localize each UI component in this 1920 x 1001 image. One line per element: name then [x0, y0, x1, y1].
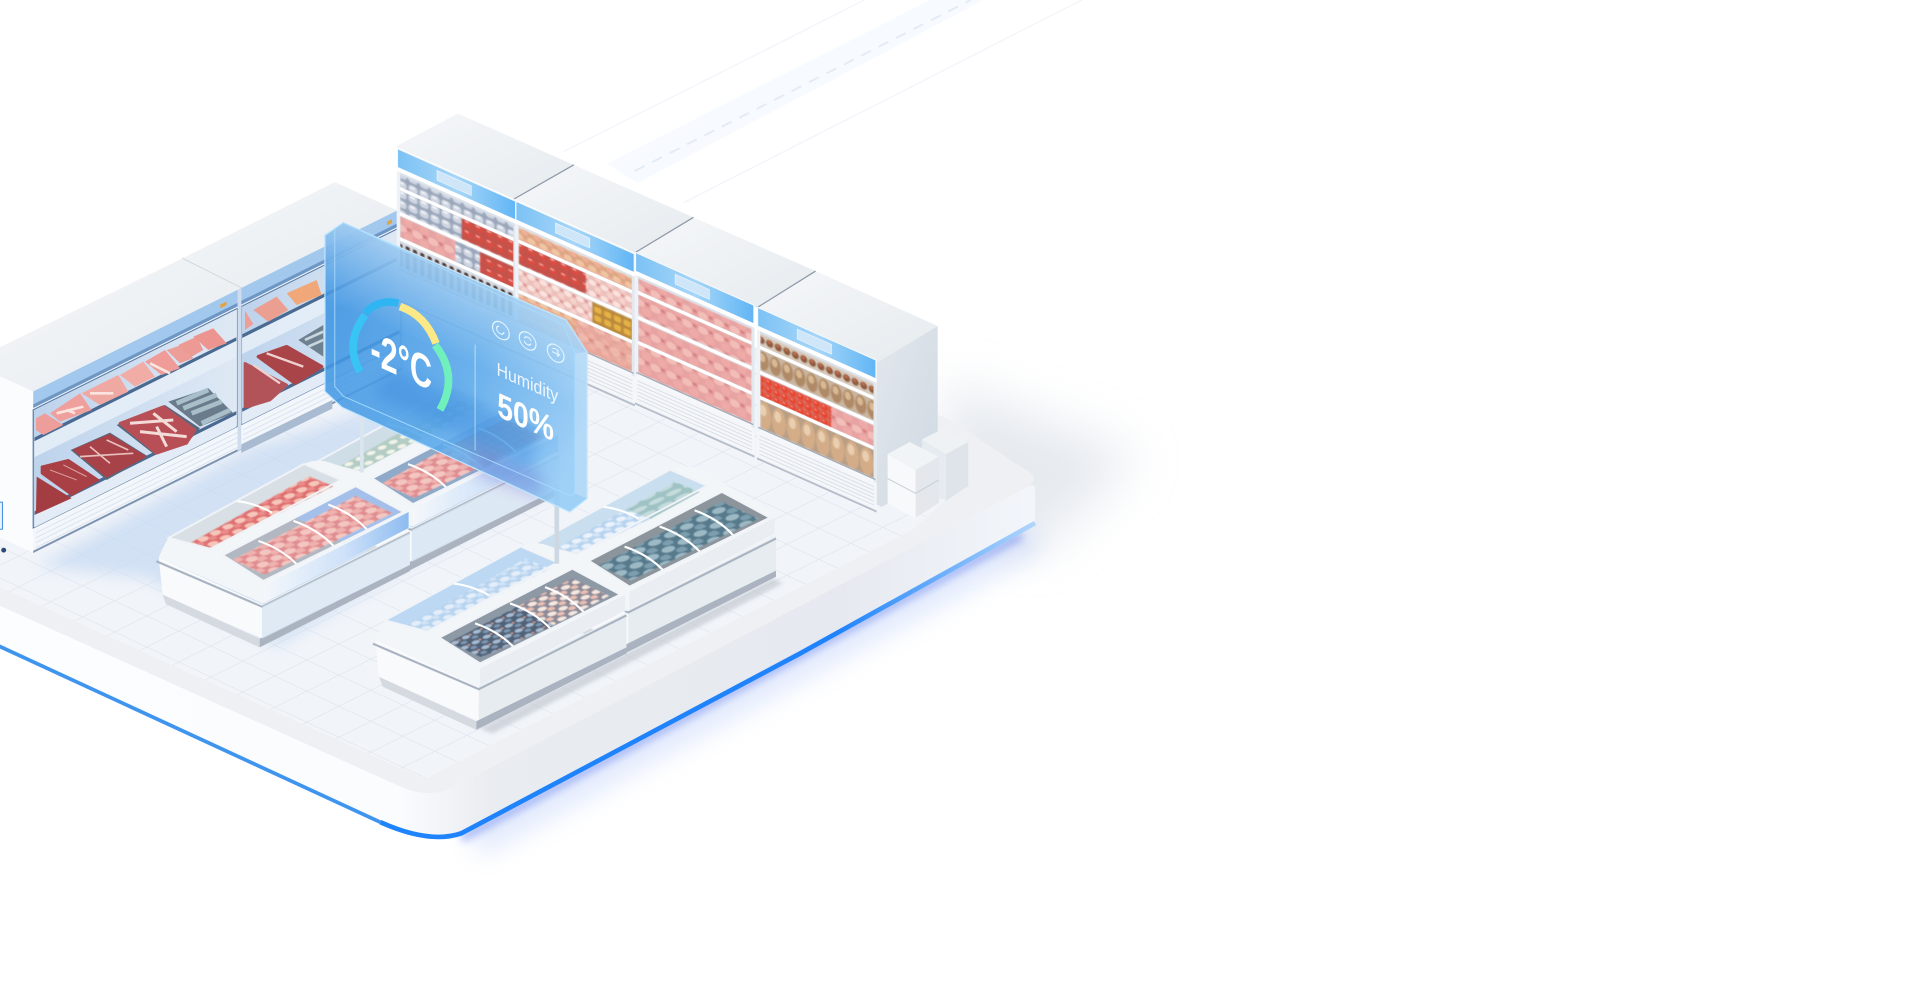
hologram panel: temperature and humidity [325, 223, 587, 512]
platform side [0, 485, 1035, 837]
cabinet front [33, 288, 241, 553]
fridge 2 products [519, 228, 632, 372]
chest freezer front right [373, 543, 626, 730]
panel borders [325, 223, 587, 512]
status icons [493, 318, 564, 365]
panel divider [474, 345, 476, 450]
back row fridge 3 [635, 217, 816, 459]
back row fridge 1 [396, 114, 574, 355]
road and guide lines in the distance [564, 0, 1082, 203]
cabinet end [0, 375, 33, 553]
fridge 3 products [639, 279, 752, 423]
left refrigerated display 2 [182, 182, 403, 453]
fridge 4 products [761, 334, 874, 478]
display 2 lower grille [241, 400, 332, 453]
chest freezer rear right [522, 466, 776, 653]
temperature gauge [353, 302, 449, 410]
back row of upright fridges [396, 114, 968, 519]
back row fridge 4 [757, 271, 938, 514]
fridge 1 products [400, 175, 514, 320]
panel side highlight [575, 352, 587, 498]
left refrigerated display 1 [0, 258, 241, 553]
wide glow under the platform edge [474, 537, 1035, 842]
freezer floor shadow [480, 578, 783, 734]
platform base [0, 246, 1035, 842]
blue light strip right [380, 523, 1035, 837]
hologram support posts [360, 396, 559, 564]
humidity value: 50% [497, 385, 554, 449]
blurred reflections inside glass [474, 443, 542, 498]
chest freezer rear left [306, 384, 559, 571]
temperature value: -2°C [370, 322, 432, 401]
meat trays [36, 328, 233, 513]
chest freezer front left [156, 461, 410, 647]
platform top surface [0, 246, 1034, 793]
humidity label: Humidity [497, 359, 558, 407]
blue floor reflection [37, 394, 542, 646]
cabinet top [0, 258, 241, 391]
close glow under the blue strip [462, 535, 1022, 838]
shopping cart corner [0, 502, 6, 553]
glass panel [325, 223, 587, 512]
tiled floor [0, 283, 954, 779]
meat and fish in display 2 [245, 280, 323, 407]
blue light strip left [0, 644, 380, 822]
compressor boxes [888, 429, 968, 519]
back row fridge 2 [514, 165, 693, 407]
soft shadow behind platform [935, 382, 1138, 548]
